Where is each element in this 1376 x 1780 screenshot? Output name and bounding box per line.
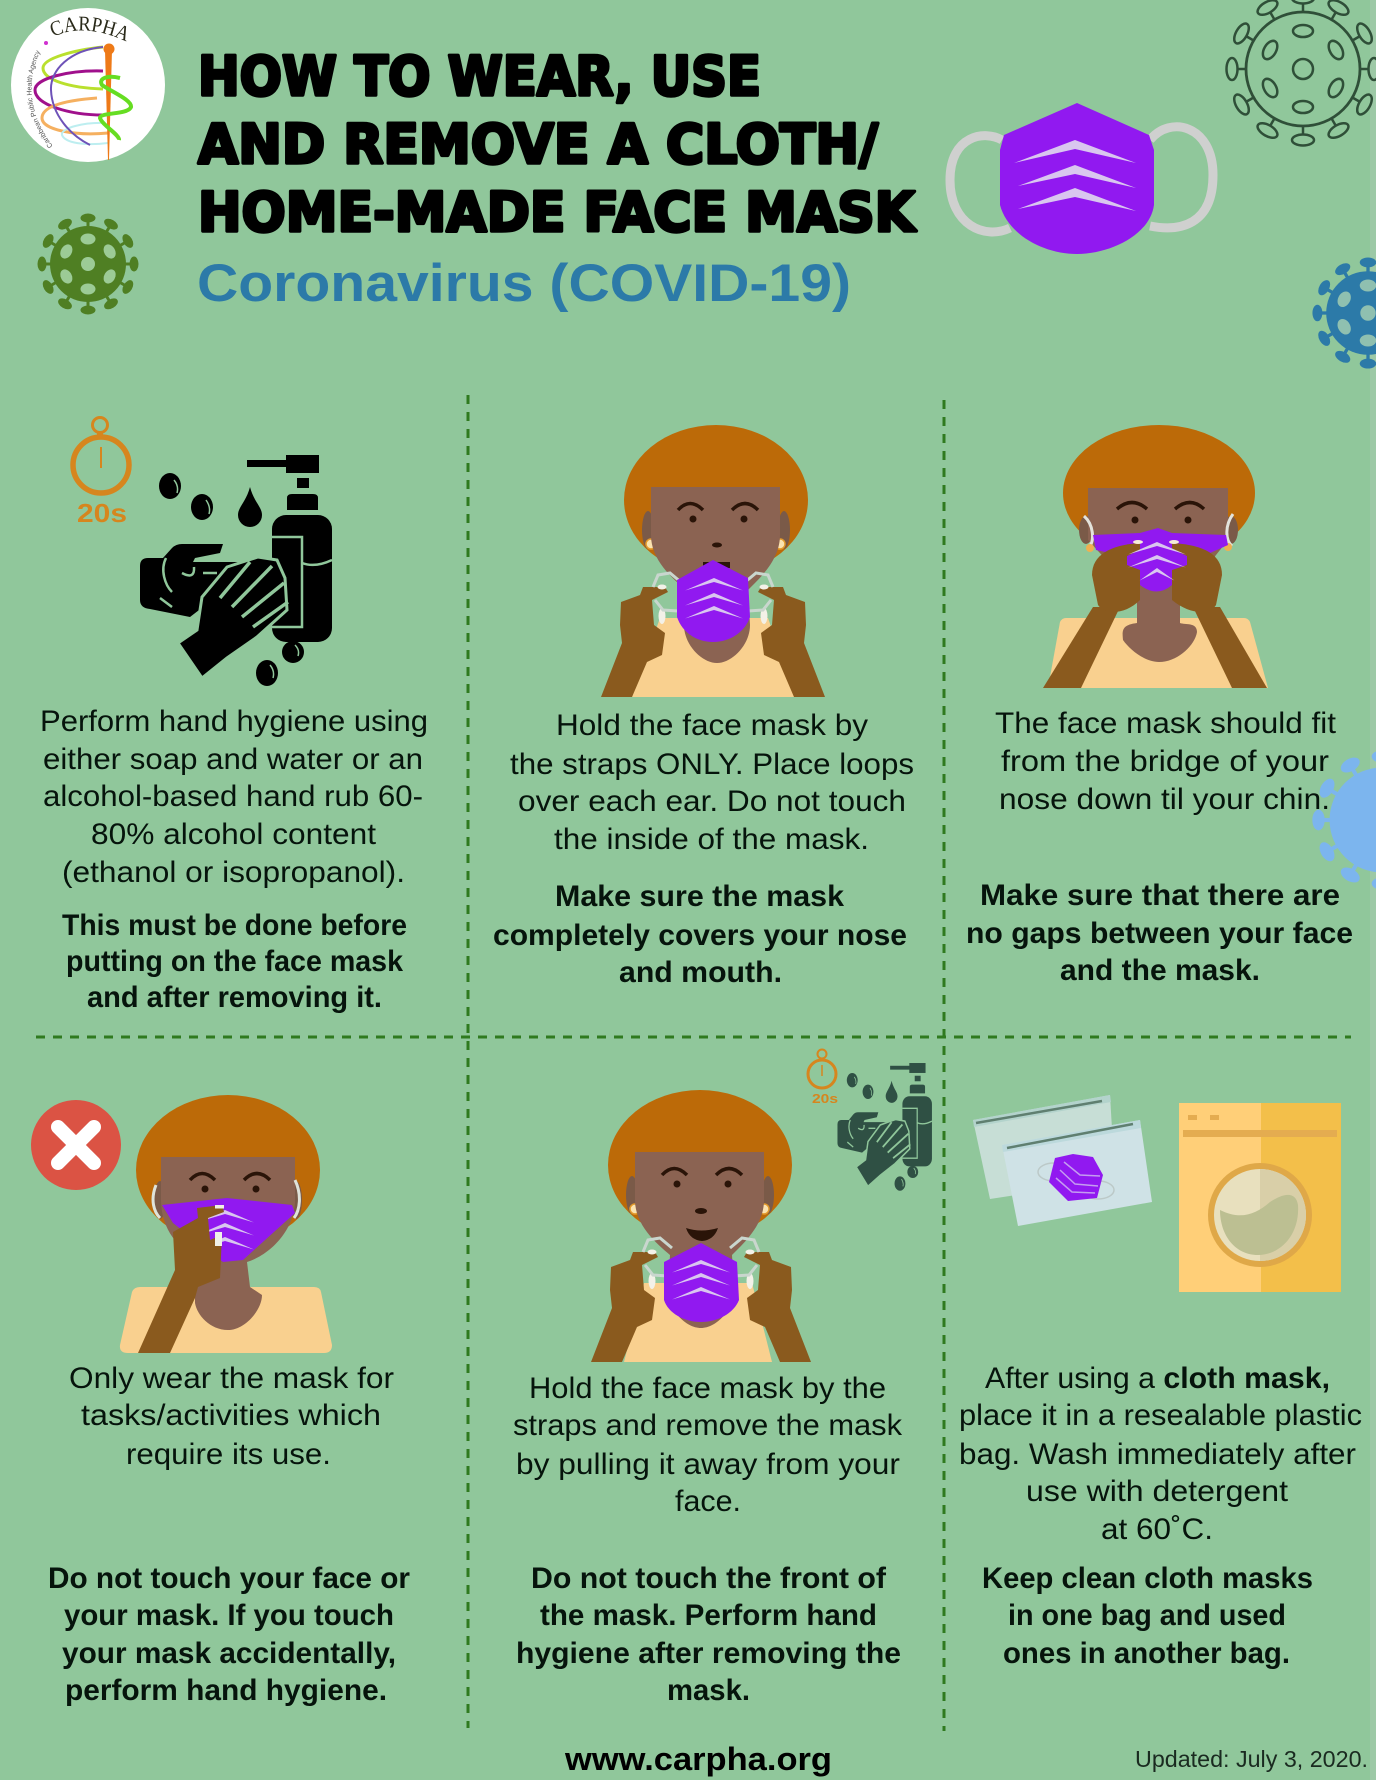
text block: emphasis: mask. bbox=[667, 1674, 750, 1707]
text block: emphasis: the mask. Perform hand bbox=[540, 1599, 877, 1632]
illustration: resealable plastic bags with mask bbox=[973, 1095, 1152, 1226]
text block: instructions: After using a cloth mask, bbox=[985, 1362, 1330, 1395]
text block: instructions: over each ear. Do not touch bbox=[518, 785, 906, 818]
text block: emphasis bbox=[982, 1562, 1313, 1670]
title: HOW TO WEAR, USE bbox=[198, 45, 761, 108]
text block: instructions bbox=[510, 709, 914, 856]
text block: instructions: (ethanol or isopropanol). bbox=[62, 856, 405, 889]
title: AND REMOVE A CLOTH/ bbox=[198, 113, 878, 176]
text block: instructions: from the bridge of your bbox=[1001, 745, 1329, 778]
text block: instructions bbox=[513, 1372, 903, 1518]
illustration: person adjusting mask bbox=[1043, 425, 1268, 688]
text block: instructions bbox=[959, 1362, 1362, 1546]
text block: instructions bbox=[995, 707, 1337, 816]
text block: instructions: Hold the face mask by bbox=[556, 709, 868, 742]
panel: hand hygiene bbox=[40, 418, 428, 1014]
text block: emphasis: your mask accidentally, bbox=[62, 1637, 396, 1670]
dividers bbox=[36, 395, 1351, 1731]
text block: instructions: straps and remove the mask bbox=[513, 1409, 903, 1442]
illustration: person touching mask bbox=[120, 1095, 332, 1353]
footer: updated date: Updated: July 3, 2020. bbox=[1135, 1746, 1368, 1772]
text block: instructions: Perform hand hygiene using bbox=[40, 705, 428, 738]
logo: CARPHA: CARPHA bbox=[50, 16, 126, 42]
text block: emphasis: and after removing it. bbox=[87, 981, 382, 1014]
text block: emphasis: no gaps between your face bbox=[966, 917, 1353, 950]
logo: CARPHA: Caribbean Public Health Agency bbox=[26, 50, 52, 148]
title bbox=[198, 45, 917, 244]
icon: red X bbox=[31, 1100, 121, 1190]
illustration: washing machine bbox=[1179, 1103, 1341, 1292]
text block: instructions: use with detergent bbox=[1026, 1475, 1289, 1508]
subtitle: Coronavirus (COVID-19) bbox=[197, 254, 851, 313]
icon: stopwatch and hand washing reminder bbox=[808, 1050, 932, 1191]
text block: emphasis bbox=[966, 879, 1353, 987]
text block: instructions: at 60˚C. bbox=[1101, 1513, 1213, 1546]
logo: CARPHA bbox=[11, 8, 165, 162]
text block: emphasis: hygiene after removing the bbox=[516, 1637, 901, 1670]
icon: blue virus bbox=[1312, 257, 1376, 369]
text block: emphasis: Do not touch the front of bbox=[531, 1562, 887, 1595]
text block: emphasis: perform hand hygiene. bbox=[65, 1674, 387, 1707]
text block: emphasis: completely covers your nose bbox=[493, 919, 907, 952]
illustration: person holding mask below chin bbox=[601, 425, 825, 697]
text block: instructions: Hold the face mask by the bbox=[529, 1372, 886, 1405]
text block: emphasis: Make sure that there are bbox=[980, 879, 1340, 912]
text block: instructions: face. bbox=[675, 1485, 741, 1518]
text block: emphasis: and mouth. bbox=[619, 956, 782, 989]
text block: instructions bbox=[69, 1362, 394, 1471]
text block: instructions: tasks/activities which bbox=[81, 1399, 381, 1432]
text block: emphasis: your mask. If you touch bbox=[64, 1599, 394, 1632]
text block: emphasis bbox=[493, 880, 907, 989]
title: HOME-MADE FACE MASK bbox=[198, 181, 917, 244]
text block: emphasis: This must be done before bbox=[62, 909, 407, 942]
text block: instructions: Only wear the mask for bbox=[69, 1362, 394, 1395]
text block: emphasis bbox=[62, 909, 407, 1014]
text block: instructions: place it in a resealable plastic bbox=[959, 1399, 1362, 1432]
text block: instructions: The face mask should fit bbox=[995, 707, 1337, 740]
icon: stopwatch and hand washing reminder: 20s bbox=[812, 1091, 838, 1106]
text block: emphasis: Keep clean cloth masks bbox=[982, 1562, 1313, 1595]
text block: instructions: bag. Wash immediately after bbox=[959, 1438, 1356, 1471]
text block: instructions: alcohol-based hand rub 60- bbox=[43, 780, 423, 813]
text block: instructions: 80% alcohol content bbox=[91, 818, 377, 851]
text block: emphasis: Make sure the mask bbox=[555, 880, 844, 913]
text block: instructions: the straps ONLY. Place loops bbox=[510, 748, 914, 781]
icon: purple face mask bbox=[950, 103, 1213, 254]
text block: emphasis: and the mask. bbox=[1060, 954, 1260, 987]
text block: emphasis bbox=[48, 1562, 410, 1707]
text block: emphasis: in one bag and used bbox=[1008, 1599, 1286, 1632]
panel: fit the mask bbox=[966, 425, 1353, 987]
icon: washing hands with soap bbox=[140, 455, 332, 686]
text block: emphasis: putting on the face mask bbox=[66, 945, 403, 978]
icon: green virus bbox=[38, 214, 138, 314]
text block: emphasis bbox=[516, 1562, 901, 1707]
text block: instructions: either soap and water or an bbox=[43, 743, 423, 776]
panel: do not touch bbox=[31, 1095, 410, 1707]
text block: instructions: by pulling it away from your bbox=[516, 1448, 900, 1481]
text block: emphasis: ones in another bag. bbox=[1003, 1637, 1290, 1670]
footer: website: www.carpha.org bbox=[564, 1741, 832, 1777]
text block: instructions: nose down til your chin. bbox=[999, 783, 1330, 816]
text block: instructions bbox=[40, 705, 428, 889]
panel: hold by straps bbox=[493, 425, 914, 989]
illustration: person removing mask bbox=[591, 1090, 811, 1362]
icon: light blue virus bbox=[1312, 750, 1376, 890]
text block: emphasis: Do not touch your face or bbox=[48, 1562, 410, 1595]
text block: instructions: require its use. bbox=[126, 1438, 331, 1471]
icon: stopwatch: 20s bbox=[77, 498, 127, 528]
panel: wash the mask bbox=[959, 1095, 1362, 1670]
panel: remove the mask bbox=[513, 1050, 932, 1707]
text block: instructions: the inside of the mask. bbox=[554, 823, 869, 856]
icon: outlined virus bbox=[1226, 0, 1376, 146]
icon: stopwatch bbox=[73, 418, 129, 528]
